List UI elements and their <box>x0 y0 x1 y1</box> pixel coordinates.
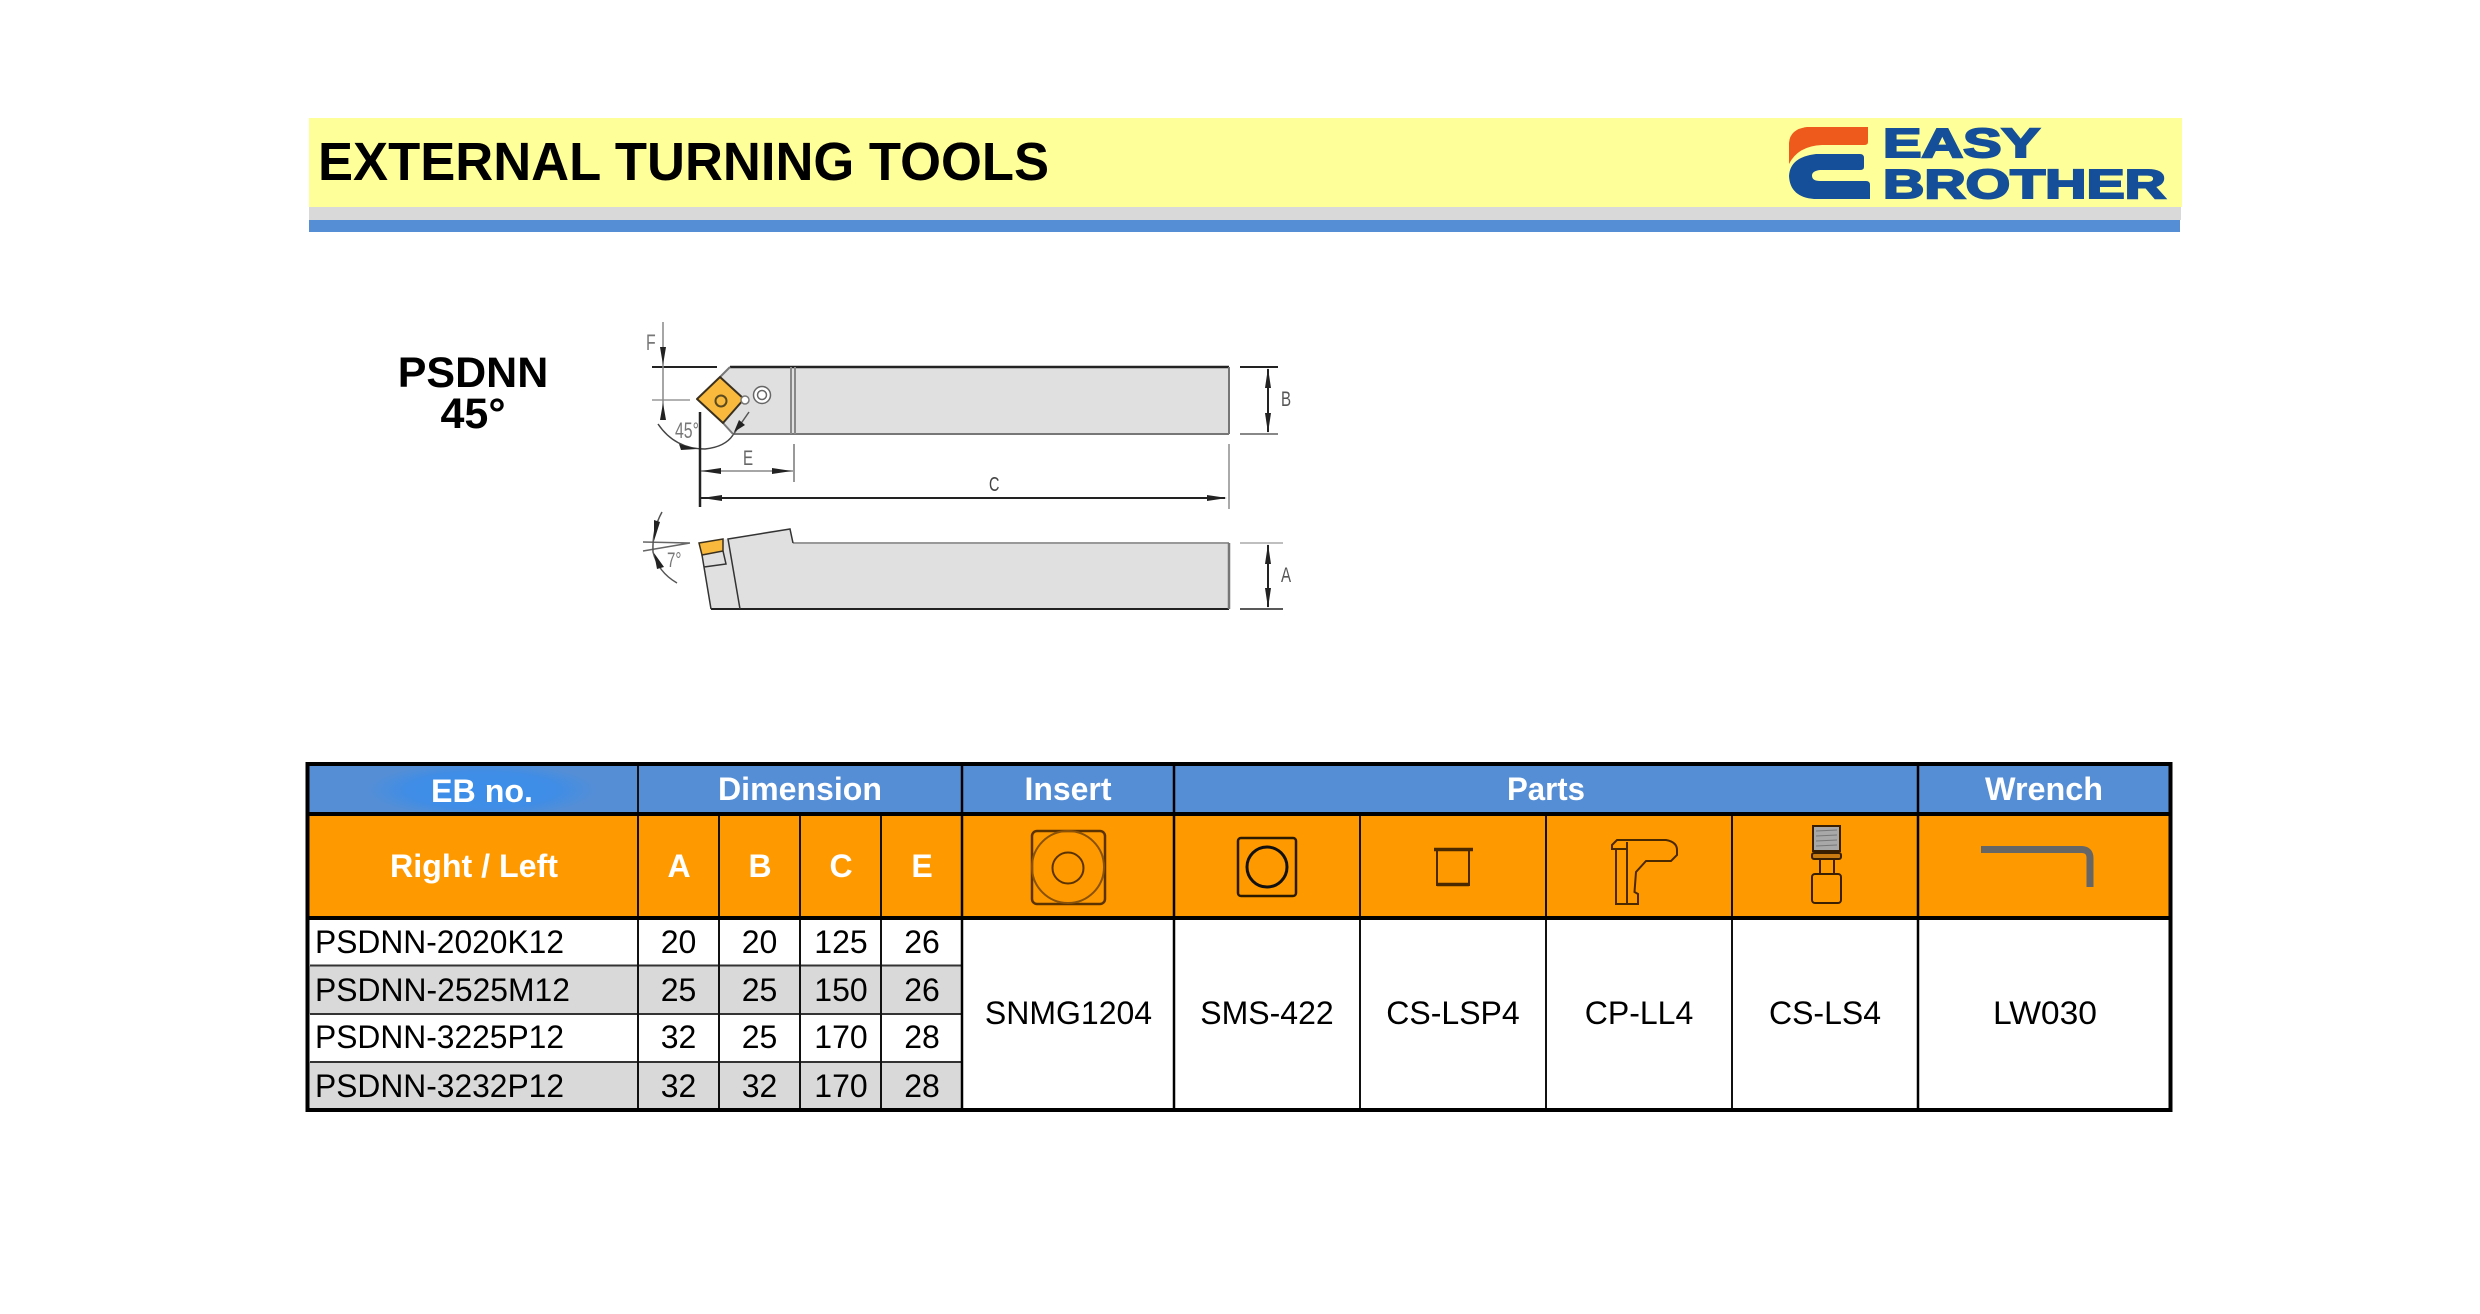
merged part numbers: CS-LSP4 <box>1386 995 1520 1031</box>
icon: clamp <box>1612 840 1677 904</box>
orange header row: Right / Left <box>390 848 558 884</box>
dimension values: 150 <box>814 972 868 1008</box>
data rows: PSDNN-3232P12 <box>315 1068 564 1104</box>
dimension values: 20 <box>742 924 777 960</box>
blue header row: Wrench <box>1985 771 2103 807</box>
icon: shim screw <box>1434 850 1473 885</box>
dimension values: 28 <box>904 1019 940 1055</box>
insert diamond <box>697 377 744 423</box>
merged part numbers <box>985 995 2097 1031</box>
dimension values: 170 <box>814 1068 868 1104</box>
dimension values: 25 <box>742 1019 777 1055</box>
icon: wrench <box>1981 850 2090 887</box>
grid lines <box>310 966 962 1062</box>
dimension B <box>1240 367 1291 434</box>
icon: clamp screw <box>1812 826 1841 903</box>
dimension B: B <box>1281 386 1291 411</box>
tool diagram: side view <box>643 512 1292 609</box>
dimension F <box>646 322 717 420</box>
product label: PSDNN <box>398 349 548 397</box>
angle 7 degrees <box>643 512 690 583</box>
product label: 45° <box>440 390 506 438</box>
tool diagram: top view <box>646 322 1291 509</box>
data rows <box>315 924 570 1104</box>
blue header row: Dimension <box>718 771 882 807</box>
dimension values: 125 <box>814 924 868 960</box>
product label <box>398 349 548 438</box>
orange header row: C <box>829 848 853 884</box>
title: EXTERNAL TURNING TOOLS <box>318 132 1049 192</box>
logo: Easy Brother: EASY <box>1883 120 2040 166</box>
orange header row <box>390 848 933 884</box>
dimension values: 32 <box>661 1068 696 1104</box>
dimension values: 25 <box>661 972 696 1008</box>
merged part numbers: CP-LL4 <box>1585 995 1693 1031</box>
logo: Easy Brother <box>1789 120 2166 207</box>
dimension C: C <box>989 473 999 496</box>
dimension A: A <box>1281 562 1292 587</box>
blue header row: EB no. <box>431 773 533 809</box>
icon: shim <box>1238 838 1296 896</box>
blue header row <box>431 771 2103 809</box>
angle 7 degrees: 7° <box>667 547 681 572</box>
tool body top view <box>720 367 1229 434</box>
data rows: PSDNN-3225P12 <box>315 1019 564 1055</box>
data rows: PSDNN-2020K12 <box>315 924 564 960</box>
blue header row: Parts <box>1507 771 1585 807</box>
dimension A <box>1240 543 1292 609</box>
insert side <box>699 539 723 555</box>
dimension values: 26 <box>904 972 940 1008</box>
icon: insert <box>1032 831 1105 904</box>
data rows: PSDNN-2525M12 <box>315 972 570 1008</box>
angle 45 degrees <box>658 412 749 450</box>
dimension values <box>661 924 940 1104</box>
merged part numbers: SNMG1204 <box>985 995 1152 1031</box>
dimension E <box>700 444 794 482</box>
dimension C <box>700 412 1229 509</box>
dimension values: 28 <box>904 1068 940 1104</box>
logo: Easy Brother: BROTHER <box>1883 161 2166 207</box>
dimension values: 32 <box>661 1019 696 1055</box>
dimension F: F <box>646 332 656 356</box>
dimension values: 32 <box>742 1068 777 1104</box>
angle 45 degrees: 45° <box>675 420 699 444</box>
header banner <box>309 118 2182 232</box>
dimension values: 20 <box>661 924 696 960</box>
blue header row: Insert <box>1024 771 1112 807</box>
tool body side view <box>699 529 1229 609</box>
merged part numbers: LW030 <box>1993 995 2097 1031</box>
orange header row: A <box>667 848 691 884</box>
dimension values: 26 <box>904 924 940 960</box>
merged part numbers: CS-LS4 <box>1769 995 1881 1031</box>
dimension values: 25 <box>742 972 777 1008</box>
orange header row: E <box>911 848 933 884</box>
table backgrounds <box>308 764 2170 1110</box>
screw circles <box>741 386 770 404</box>
dimension E: E <box>743 445 753 470</box>
spec table <box>308 762 2170 1110</box>
merged part numbers: SMS-422 <box>1200 995 1334 1031</box>
orange header row: B <box>748 848 772 884</box>
dimension values: 170 <box>814 1019 868 1055</box>
